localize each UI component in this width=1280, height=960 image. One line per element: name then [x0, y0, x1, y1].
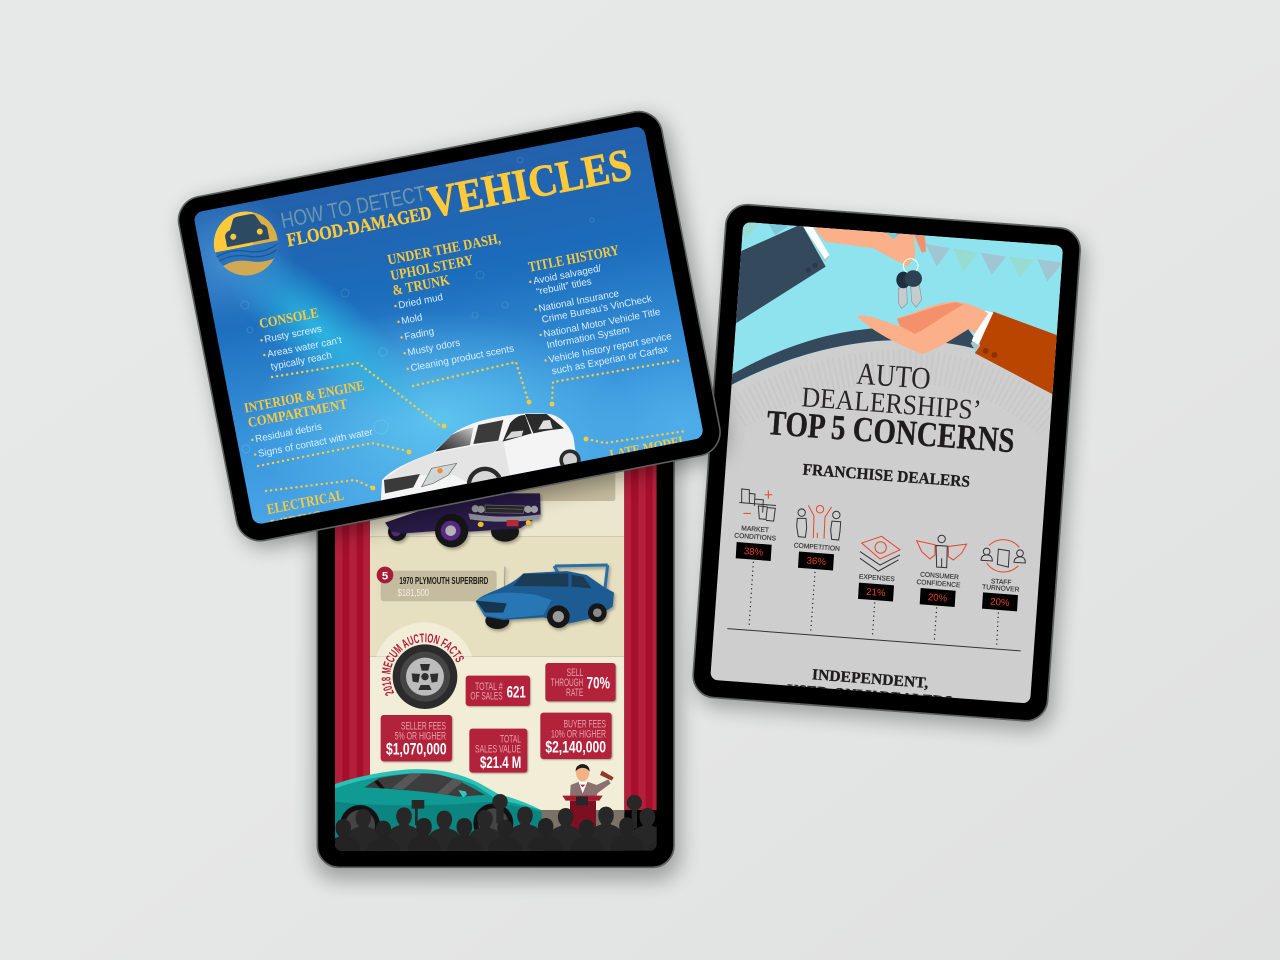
sky [732, 222, 1063, 392]
section: interior and engine: Residual debris [254, 421, 323, 445]
car label box [381, 571, 497, 601]
stat: buyer fees [540, 713, 612, 759]
section: under the dash: Cleaning product scents [410, 343, 515, 374]
headline: VEHICLES [424, 139, 635, 227]
stat: sell through rate: SELL [567, 667, 583, 679]
section: under the dash: UNDER THE DASH, [386, 231, 502, 269]
curtain right [624, 465, 657, 810]
title: AUTO [855, 355, 932, 396]
concern: expenses: 21% [866, 587, 886, 599]
stat: total sales value [469, 729, 527, 773]
section: electrical wiring: WIRING [270, 508, 324, 534]
section: title history: Information System [546, 324, 631, 351]
concrete texture [690, 200, 1090, 741]
blue plymouth superbird [476, 565, 614, 629]
concern: staff turnover [981, 540, 1025, 646]
connector: late model [584, 431, 686, 443]
connector: title history [550, 360, 682, 406]
section: console: Areas water can’t [266, 335, 343, 360]
stat: seller fees: SELLER FEES [401, 720, 446, 732]
bunting [743, 222, 1063, 282]
section: title history: Avoid salvaged/ [532, 263, 602, 287]
curtain left [335, 520, 370, 784]
white car [381, 413, 581, 513]
road band [732, 328, 974, 385]
section: console: typically reach [270, 350, 333, 373]
receiving hand [857, 302, 988, 354]
concern: staff turnover: 20% [990, 597, 1010, 609]
section: late model: LATE MODEL [608, 433, 688, 464]
car label box: 1970 PLYMOUTH SUPERBIRD [399, 576, 488, 587]
car label box: $181,500 [398, 588, 429, 599]
palm shading [897, 302, 963, 334]
section: title history: “rebuilt” titles [535, 276, 593, 298]
section: title history: National Insurance [538, 288, 621, 315]
stat: seller fees: $1,070,000 [386, 740, 447, 759]
title: TOP 5 CONCERNS [765, 403, 1016, 460]
section: under the dash: Fading [404, 326, 435, 343]
section: interior and engine: COMPARTMENT [247, 397, 349, 431]
concern: expenses: EXPENSES [859, 574, 895, 583]
section: console: CONSOLE [258, 306, 320, 332]
purple muscle car [385, 493, 541, 547]
connector: electrical [266, 480, 375, 491]
section: title history: TITLE HISTORY [527, 242, 621, 276]
tire icon [393, 644, 457, 709]
stat: total sales [466, 676, 530, 706]
stat: sell through rate: THROUGH [551, 677, 583, 689]
concern: competition: 36% [806, 556, 827, 568]
section: under the dash: UPHOLSTERY [389, 252, 475, 284]
section: title history: Vehicle history report service [548, 331, 673, 366]
concern: consumer confidence: CONSUMER [920, 571, 959, 581]
stat: sell through rate: RATE [566, 687, 583, 699]
section: under the dash: Mold [401, 312, 423, 327]
stat: total sales: TOTAL # [475, 681, 503, 693]
concern: staff turnover: STAFF [991, 578, 1012, 587]
stat: buyer fees: BUYER FEES [564, 718, 606, 730]
section: console: Rusty screws [264, 324, 323, 346]
rank badge 5: 5 [382, 570, 388, 582]
stat: sell through rate [545, 663, 616, 701]
stat: seller fees [381, 715, 452, 761]
concern: market conditions: MARKET [741, 525, 769, 534]
concern: consumer confidence [916, 535, 967, 641]
flood car logo [208, 204, 297, 289]
left sleeve [735, 224, 829, 324]
section: under the dash: Musty odors [407, 338, 461, 359]
title [768, 364, 1014, 452]
independent dealers heading: INDEPENDENT, [811, 666, 929, 692]
stat: sell through rate: 70% [587, 674, 610, 693]
section: under the dash: & TRUNK [391, 272, 452, 299]
section: under the dash [384, 231, 523, 375]
headline [278, 139, 635, 256]
stat: total sales: OF SALES [470, 690, 503, 702]
headline: HOW TO DETECT [279, 181, 428, 233]
section: interior and engine [243, 379, 374, 461]
teal car [335, 769, 543, 853]
concern: market conditions: CONDITIONS [734, 532, 777, 543]
section: title history: such as Experian or Carfax [551, 344, 669, 377]
concern: competition [793, 505, 841, 633]
stat: total sales: 621 [507, 682, 526, 701]
semicircle backing [376, 622, 472, 657]
giving hand [812, 225, 926, 267]
concern: market conditions: 38% [743, 546, 764, 559]
audience silhouettes [335, 794, 657, 851]
stat: buyer fees: $2,140,000 [545, 737, 606, 756]
title: DEALERSHIPS’ [800, 382, 982, 427]
concern: staff turnover: TURNOVER [982, 584, 1020, 594]
connector: interior [258, 443, 411, 466]
rank badge 5 [377, 567, 393, 583]
section: interior and engine: INTERIOR & ENGINE [243, 379, 366, 417]
curved heading: 2018 MECUM AUCTION FACTS [382, 633, 464, 696]
section: interior and engine: Signs of contact with water [257, 427, 374, 460]
stat: total sales value: SALES VALUE [475, 744, 521, 756]
concern: consumer confidence: 20% [927, 592, 948, 605]
water glow [155, 190, 770, 530]
stat: total sales value: $21.4 M [480, 753, 521, 772]
section: title history: Crime Bureau’s VinCheck [541, 294, 653, 326]
baseline rule [727, 629, 1021, 651]
tablet: classic car auction infographic [302, 459, 692, 892]
stat: total sales value: TOTAL [500, 734, 521, 746]
concern: expenses [858, 536, 900, 638]
concern: consumer confidence: CONFIDENCE [916, 579, 961, 589]
tablet: how to detect flood-damaged vehicles [155, 107, 770, 551]
bubbles [241, 157, 603, 453]
tan title box behind top car [511, 473, 616, 501]
section: electrical wiring: ELECTRICAL [266, 488, 345, 518]
section: under the dash: Dried mud [397, 292, 444, 311]
section: console [256, 303, 346, 374]
subheading: FRANCHISE DEALERS [802, 461, 971, 491]
section: title history: National Motor Vehicle Title [543, 307, 662, 340]
connector: console [272, 363, 446, 428]
concern: market conditions [734, 489, 777, 628]
right sleeve [970, 310, 1057, 394]
independent dealers heading [788, 669, 952, 698]
connector: under the dash [413, 362, 531, 404]
headline: FLOOD-DAMAGED [285, 203, 433, 251]
concern: competition: COMPETITION [793, 542, 840, 553]
tyre track [737, 366, 1050, 423]
stat: seller fees: 5% OR HIGHER [395, 730, 446, 742]
tablet: auto dealerships top 5 concerns [690, 200, 1090, 741]
auctioneer at podium [562, 764, 614, 832]
section: title history [525, 236, 675, 378]
section: electrical wiring [266, 488, 348, 534]
stat: buyer fees: 10% OR HIGHER [551, 728, 606, 740]
independent dealers heading: USED-ONLY DEALERS [786, 681, 953, 711]
car keys [896, 259, 922, 309]
